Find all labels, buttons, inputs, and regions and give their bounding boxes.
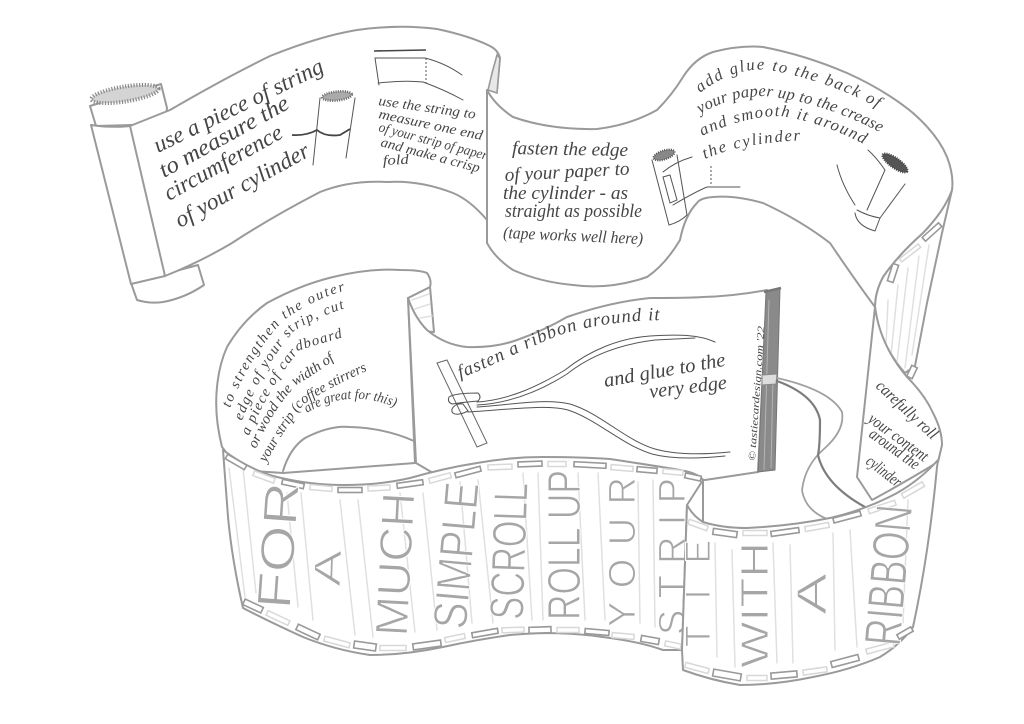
text: add glue instruction: the cylinder	[702, 130, 800, 158]
big words on left strip: STRIP	[652, 478, 694, 635]
big words on right strip: RIBBON	[854, 503, 924, 648]
text: measure one end instruction: measure one end	[377, 107, 485, 144]
panel: bottom strip left	[223, 450, 703, 655]
text: strengthen instruction	[223, 284, 397, 466]
text: measure one end instruction	[377, 94, 490, 176]
icon: left cylinder bottom	[131, 265, 204, 303]
text: measure one end instruction: use the string to	[377, 94, 477, 123]
text: strengthen instruction: or wood the width of	[251, 350, 334, 448]
icon: small rod with knotted ribbon	[437, 335, 730, 458]
icon: hanging ribbon tails	[777, 378, 865, 519]
text: copyright credit: © tastiecardesign.com '22	[747, 326, 767, 461]
icon: cylinder with string	[292, 90, 355, 165]
big words on right strip: A	[788, 573, 835, 615]
text: fasten edge instruction: fasten the edge	[512, 138, 628, 161]
big words on left strip: SCROLL	[481, 482, 539, 620]
text: fasten ribbon: fasten a ribbon around it	[458, 308, 660, 382]
panel: bottom strip right	[679, 460, 938, 685]
stitches along left strip bottom	[243, 599, 681, 651]
icon: strip and crease diagram	[374, 50, 463, 100]
text: fasten edge instruction: straight as possible	[505, 201, 642, 222]
text: measure one end instruction: and make a crisp	[379, 135, 481, 176]
fold at bottom strip	[702, 480, 704, 522]
icon: cylinder with taped paper	[652, 147, 740, 225]
text: add glue instruction: your paper up to the crease	[696, 88, 883, 132]
text: fasten edge instruction: of your paper to	[504, 158, 630, 186]
panel: ribbon fastening section	[407, 286, 782, 481]
big words on left strip: A	[307, 548, 350, 587]
text: carefully roll instruction: cylinder	[863, 451, 906, 491]
text: string instruction: use a piece of string	[149, 53, 327, 157]
icon: left cylinder top	[90, 81, 167, 126]
panel: carefully roll section	[857, 307, 943, 500]
big words on right strip: TIE	[679, 540, 718, 647]
icon: rolled paper cylinder	[837, 150, 910, 231]
text: carefully roll instruction: your content	[863, 408, 933, 466]
big words on left strip: MUCH	[365, 491, 425, 638]
panel: back of ribbon at right	[875, 190, 952, 379]
text: strengthen instruction: your strip (coffee stirrers	[260, 364, 366, 466]
text: add glue instruction: and smooth it around	[701, 105, 869, 144]
text: strengthen instruction: to strengthen the outer	[223, 284, 344, 407]
text: glue to the edge: and glue to the	[602, 349, 727, 392]
text: fasten edge instruction: (tape works well here)	[503, 223, 644, 248]
big words on right strip	[679, 503, 924, 668]
text: strengthen instruction: are great for this)	[306, 388, 397, 412]
icon: dark rod with ribbon	[758, 288, 781, 472]
text: glue to the edge: very edge	[648, 372, 728, 403]
panel: strengthen section	[215, 268, 432, 474]
stitches along left strip top	[225, 454, 701, 492]
big words on left strip	[248, 470, 694, 638]
text: measure one end instruction: of your strip of paper	[377, 120, 490, 164]
panel: back fold behind middle section	[408, 287, 434, 332]
text: carefully roll instruction	[863, 376, 943, 491]
big words on left strip: FOR	[248, 480, 310, 611]
panel: top ribbon left section	[90, 27, 500, 303]
text: string instruction: of your cylinder	[170, 137, 315, 232]
text: fasten edge instruction	[503, 138, 644, 248]
text: fasten edge instruction: the cylinder - as	[503, 183, 628, 204]
big words on left strip: SIMPLE	[424, 480, 490, 631]
text: string instruction: circumference	[159, 120, 287, 205]
big words on left strip: ROLL UP	[538, 470, 590, 620]
text: string instruction	[149, 53, 327, 232]
guide lines of left strip	[229, 468, 655, 637]
text: string instruction: to measure the	[154, 90, 293, 182]
text: carefully roll instruction: carefully roll	[872, 376, 943, 443]
stitches along right strip	[685, 482, 925, 681]
text: add glue instruction	[696, 60, 885, 158]
guide lines of right strip	[715, 500, 908, 667]
big words on left strip: YOUR	[602, 477, 644, 627]
text: carefully roll instruction: around the	[866, 424, 924, 473]
fold hatch at top ribbon end	[488, 55, 500, 93]
text: measure one end instruction: fold	[382, 153, 410, 169]
text: add glue instruction: add glue to the back of	[698, 60, 885, 110]
text: strengthen instruction: a piece of cardboard	[244, 328, 342, 435]
big words on right strip: WITH	[734, 542, 777, 668]
panel: top ribbon right section	[486, 46, 954, 308]
text: strengthen instruction: edge of your strip, cut	[236, 300, 344, 420]
